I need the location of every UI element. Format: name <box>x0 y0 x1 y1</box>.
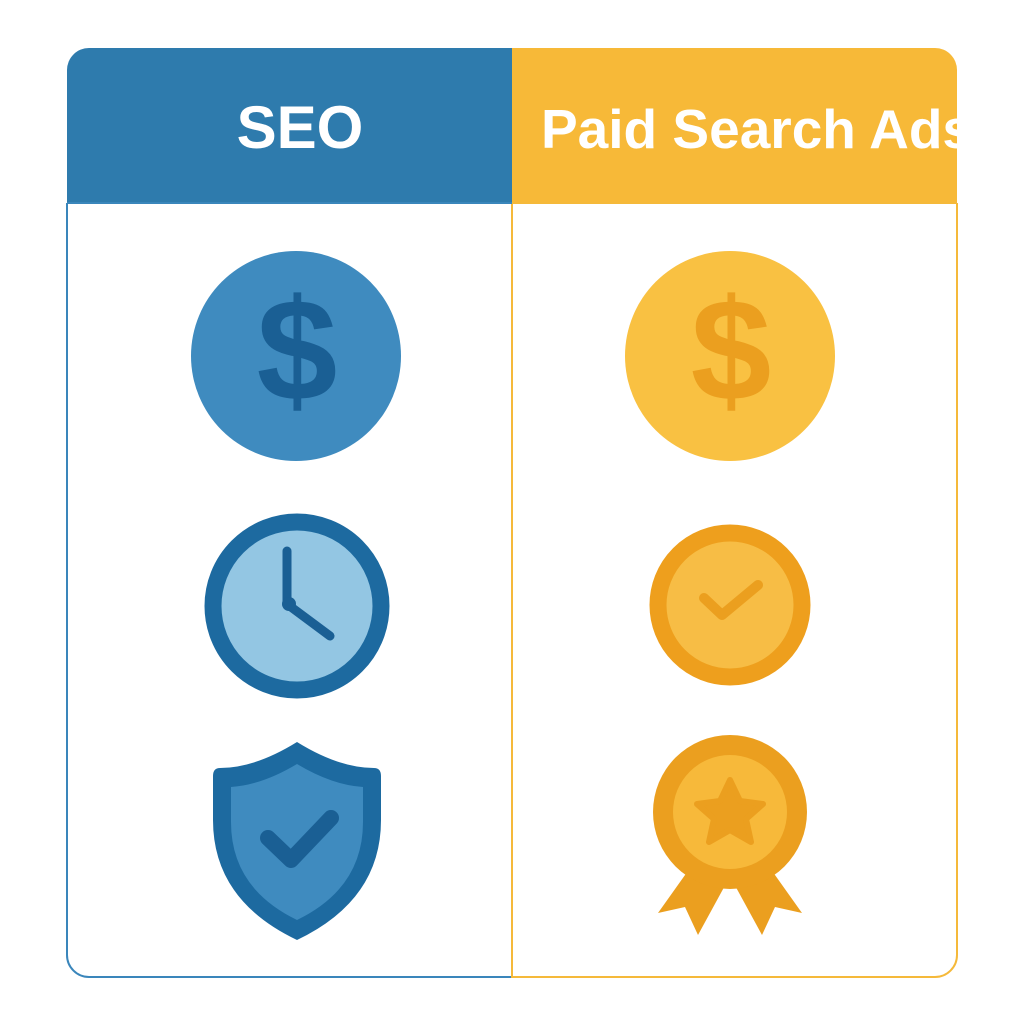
icon: Paid dollar <box>625 251 835 461</box>
icon: Paid check circle <box>658 533 802 677</box>
icon: SEO clock <box>213 522 381 690</box>
heading: Paid Search Ads: Paid Search Ads <box>541 98 973 160</box>
panel: SEO column <box>67 48 512 202</box>
icon: Paid dollar: $ <box>691 269 771 431</box>
comparison infographic <box>66 48 958 978</box>
icon: SEO dollar <box>191 251 401 461</box>
heading: SEO: SEO <box>237 94 363 161</box>
heading: SEO <box>67 48 512 203</box>
heading: Paid Search Ads <box>512 48 973 203</box>
panel: Paid Search Ads column <box>512 48 957 202</box>
icon: Paid medal <box>653 735 807 935</box>
icon: SEO dollar: $ <box>257 269 337 431</box>
icon: SEO shield <box>213 742 381 940</box>
